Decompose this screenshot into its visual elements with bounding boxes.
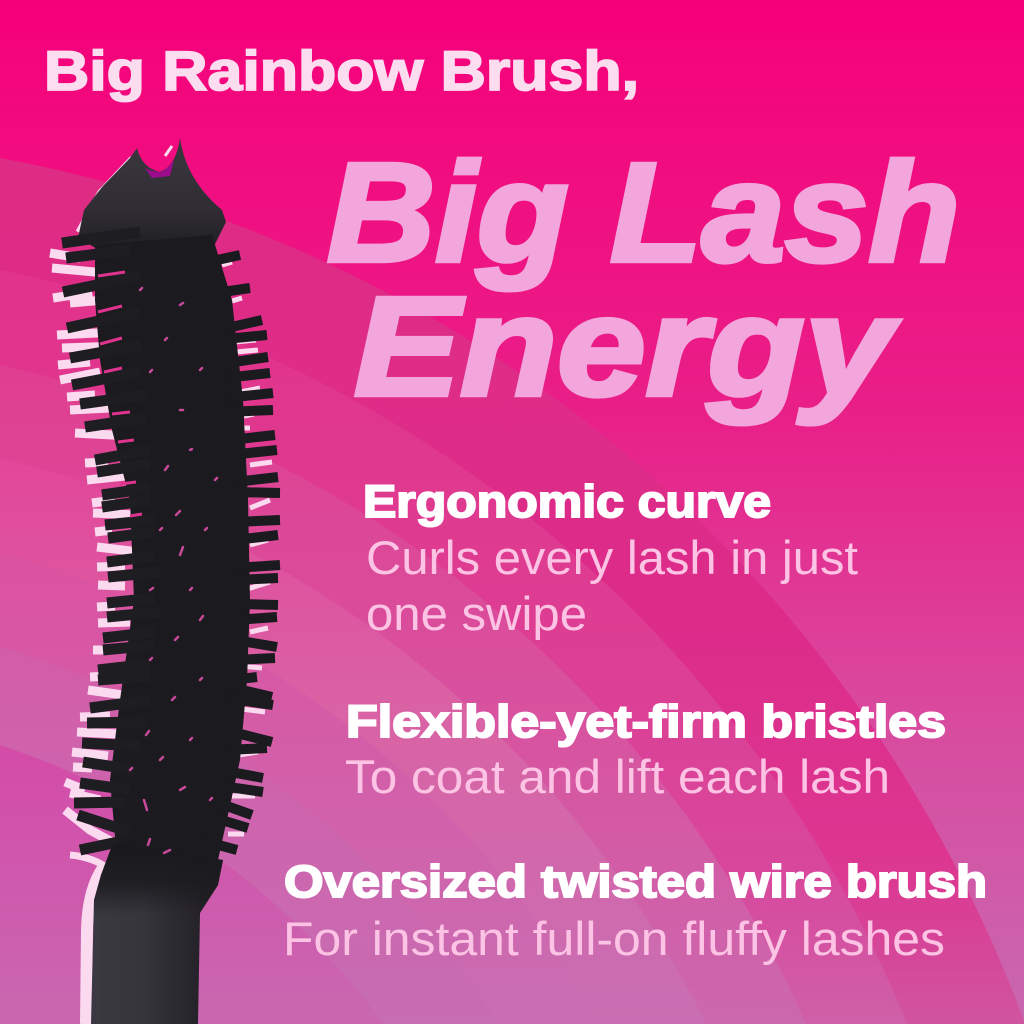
brush pale offset shadow: [50, 146, 272, 1024]
feature: oversized twisted wire brush: Oversized twisted wire brush: [284, 856, 987, 907]
right bristles: [190, 255, 280, 850]
ferrule handle: [91, 843, 223, 1024]
headline: Big Lash Energy: [327, 133, 960, 425]
feature: flexible bristles: Flexible-yet-firm bristles: [346, 696, 946, 747]
feature: flexible bristles: To coat and lift each lash: [345, 750, 890, 803]
feature: oversized twisted wire brush: For instant full-on fluffy lashes: [283, 912, 945, 965]
feature: oversized twisted wire brush: [283, 856, 987, 965]
mascara brush illustration: [50, 138, 280, 1024]
heading: Big Rainbow Brush: Big Rainbow Brush,: [44, 39, 639, 102]
headline: Big Lash Energy: Big Lash: [327, 133, 960, 291]
brush tip cone: [78, 138, 226, 262]
feature: flexible bristles: [345, 696, 946, 803]
gaps between bristles: [98, 272, 142, 516]
pink specks on bristles: [130, 288, 217, 853]
headline: Big Lash Energy: Energy: [354, 267, 900, 425]
feature: ergonomic curve: one swipe: [366, 587, 587, 640]
feature: ergonomic curve: Ergonomic curve: [363, 476, 771, 527]
left bristles: [62, 232, 160, 850]
brush core: [95, 235, 250, 860]
feature: ergonomic curve: Curls every lash in just: [366, 531, 858, 584]
purple notch highlight: [145, 160, 174, 178]
feature: ergonomic curve: [363, 476, 858, 640]
